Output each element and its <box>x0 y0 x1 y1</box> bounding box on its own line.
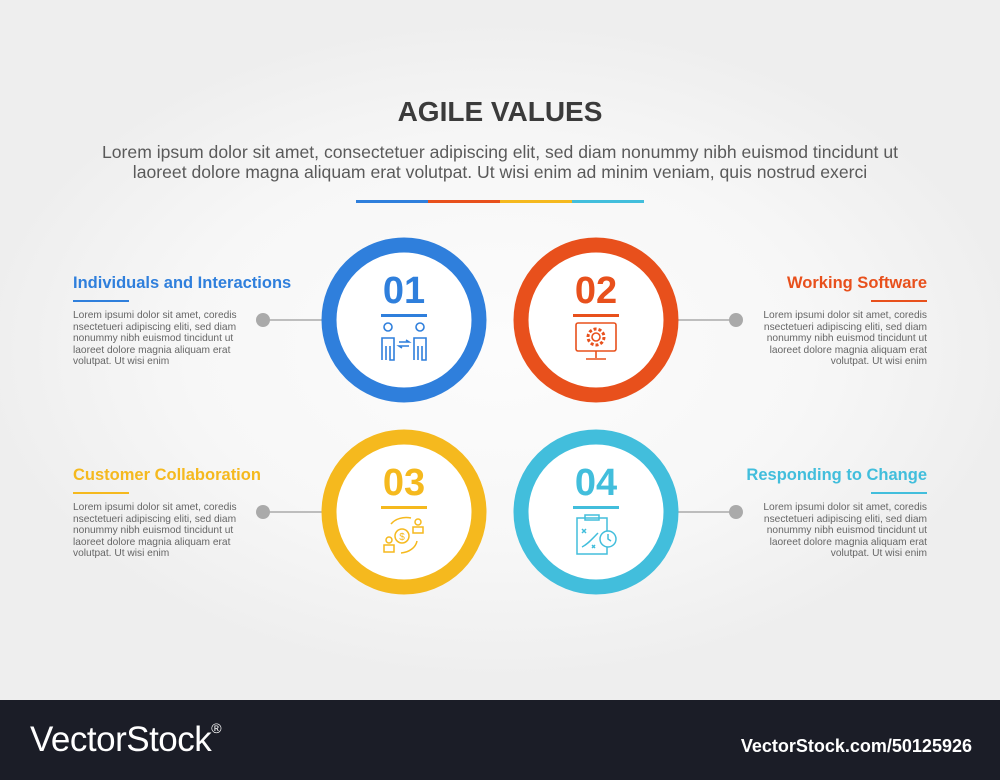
subtitle text <box>102 142 898 182</box>
panel: Customer Collaboration: Lorem ipsumi dolor sit amet, coredis nsectetueri adipiscing eliti, sed diam nonummy nibh euismod tincidunt ut laoreet dolore magnia aliquam erat volutpat. Ut wisi enim <box>73 502 237 559</box>
panel: Working Software <box>763 274 927 367</box>
panel: Working Software: Working Software <box>787 274 927 292</box>
panel: Individuals and Interactions: Individuals and Interactions <box>73 274 291 292</box>
icon: clipboard strategy clock <box>577 515 616 554</box>
title: AGILE VALUES <box>398 96 602 127</box>
footer band <box>0 700 1000 780</box>
colored divider bar <box>356 200 644 203</box>
icon: money exchange: $ <box>399 532 405 543</box>
panel: Individuals and Interactions <box>73 274 291 367</box>
icon: monitor with gear <box>576 323 616 359</box>
circle 02: 02 <box>575 270 617 312</box>
circle 01 <box>322 238 486 402</box>
panel: Responding to Change: Lorem ipsumi dolor sit amet, coredis nsectetueri adipiscing eliti, sed diam nonummy nibh euismod tincidunt ut laoreet dolore magnia aliquam erat volutpat. Ut wisi enim <box>763 502 927 559</box>
circle 02 <box>514 238 678 402</box>
panel: Customer Collaboration: Customer Collaboration <box>73 466 261 484</box>
circle 03 <box>322 430 486 594</box>
panel: Responding to Change <box>746 466 927 559</box>
circle 04: 04 <box>575 462 617 504</box>
subtitle text: Lorem ipsum dolor sit amet, consectetuer adipiscing elit, sed diam nonummy nibh euismod tincidunt ut <box>102 142 898 162</box>
circle 04 <box>514 430 678 594</box>
circle 03: 03 <box>383 462 425 504</box>
panel: Responding to Change: Responding to Change <box>746 466 927 484</box>
circle 01: 01 <box>383 270 425 312</box>
panel: Working Software: Lorem ipsumi dolor sit amet, coredis nsectetueri adipiscing eliti, sed diam nonummy nibh euismod tincidunt ut laoreet dolore magnia aliquam erat volutpat. Ut wisi enim <box>763 310 927 367</box>
icon: money exchange <box>384 517 423 553</box>
panel: Customer Collaboration <box>73 466 261 559</box>
footer logo: VectorStock® <box>30 720 221 759</box>
footer id: VectorStock.com/50125926 <box>741 736 972 756</box>
panel: Individuals and Interactions: Lorem ipsumi dolor sit amet, coredis nsectetueri adipiscing eliti, sed diam nonummy nibh euismod tincidunt ut laoreet dolore magnia aliquam erat volutpat. Ut wisi enim <box>73 310 237 367</box>
subtitle text: laoreet dolore magna aliquam erat volutpat. Ut wisi enim ad minim veniam, quis nostrud exerci <box>133 162 867 182</box>
icon: people exchange <box>382 323 426 360</box>
